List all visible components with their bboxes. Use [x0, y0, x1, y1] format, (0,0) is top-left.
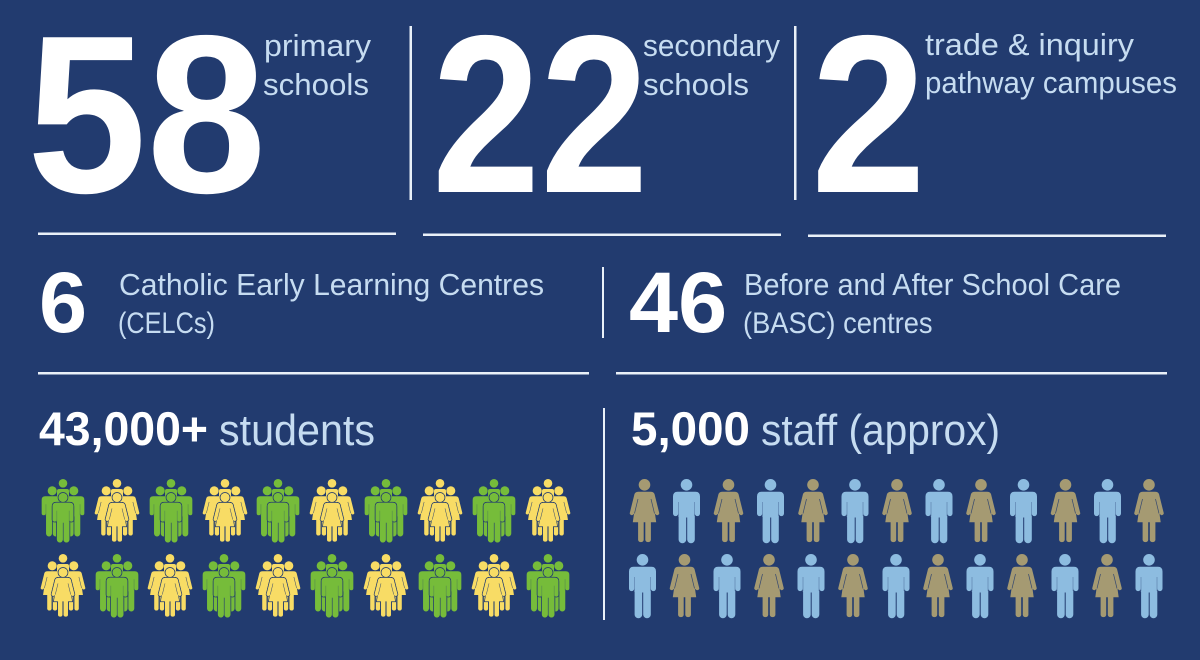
stat: 2 trade and inquiry pathway campuses: trade & inquiry — [925, 27, 1135, 62]
stat: 46 Before and After School Care: 46 — [629, 255, 727, 351]
heading: 43,000+ students: students — [219, 406, 375, 455]
stat: 58 primary schools: primary — [264, 28, 372, 63]
stat: 22 secondary schools: schools — [643, 67, 749, 102]
heading: 5,000 staff — [631, 402, 1000, 455]
stat: 6 Catholic Early Learning Centres: (CELCs) — [118, 306, 215, 339]
stat: 58 primary schools — [27, 0, 372, 240]
stat: 6 Catholic Early Learning Centres: 6 — [39, 255, 87, 351]
heading: 5,000 staff: staff (approx) — [761, 406, 1000, 455]
stat: 46 Before and After School Care: Before and After School Care — [744, 267, 1121, 302]
stat: 58 primary schools: schools — [263, 67, 369, 102]
stat: 2 trade and inquiry pathway campuses — [811, 0, 1177, 240]
pictogram: staff — [629, 479, 1164, 618]
heading: 43,000+ students: 43,000+ — [39, 402, 208, 455]
stat: 22 secondary schools: secondary — [643, 28, 780, 63]
stat: 6 Catholic Early Learning Centres: Catholic Early Learning Centres — [119, 267, 544, 302]
stat: 22 secondary schools — [432, 0, 780, 240]
pictogram: students — [41, 479, 570, 618]
stat: 46 Before and After School Care — [629, 255, 1121, 351]
stat: 6 Catholic Early Learning Centres — [39, 255, 544, 351]
stat: 46 Before and After School Care: (BASC) centres — [743, 307, 933, 340]
heading: 43,000+ students — [39, 402, 375, 455]
stat: 2 trade and inquiry pathway campuses: pathway campuses — [925, 65, 1177, 100]
heading: 5,000 staff: 5,000 — [631, 402, 750, 455]
